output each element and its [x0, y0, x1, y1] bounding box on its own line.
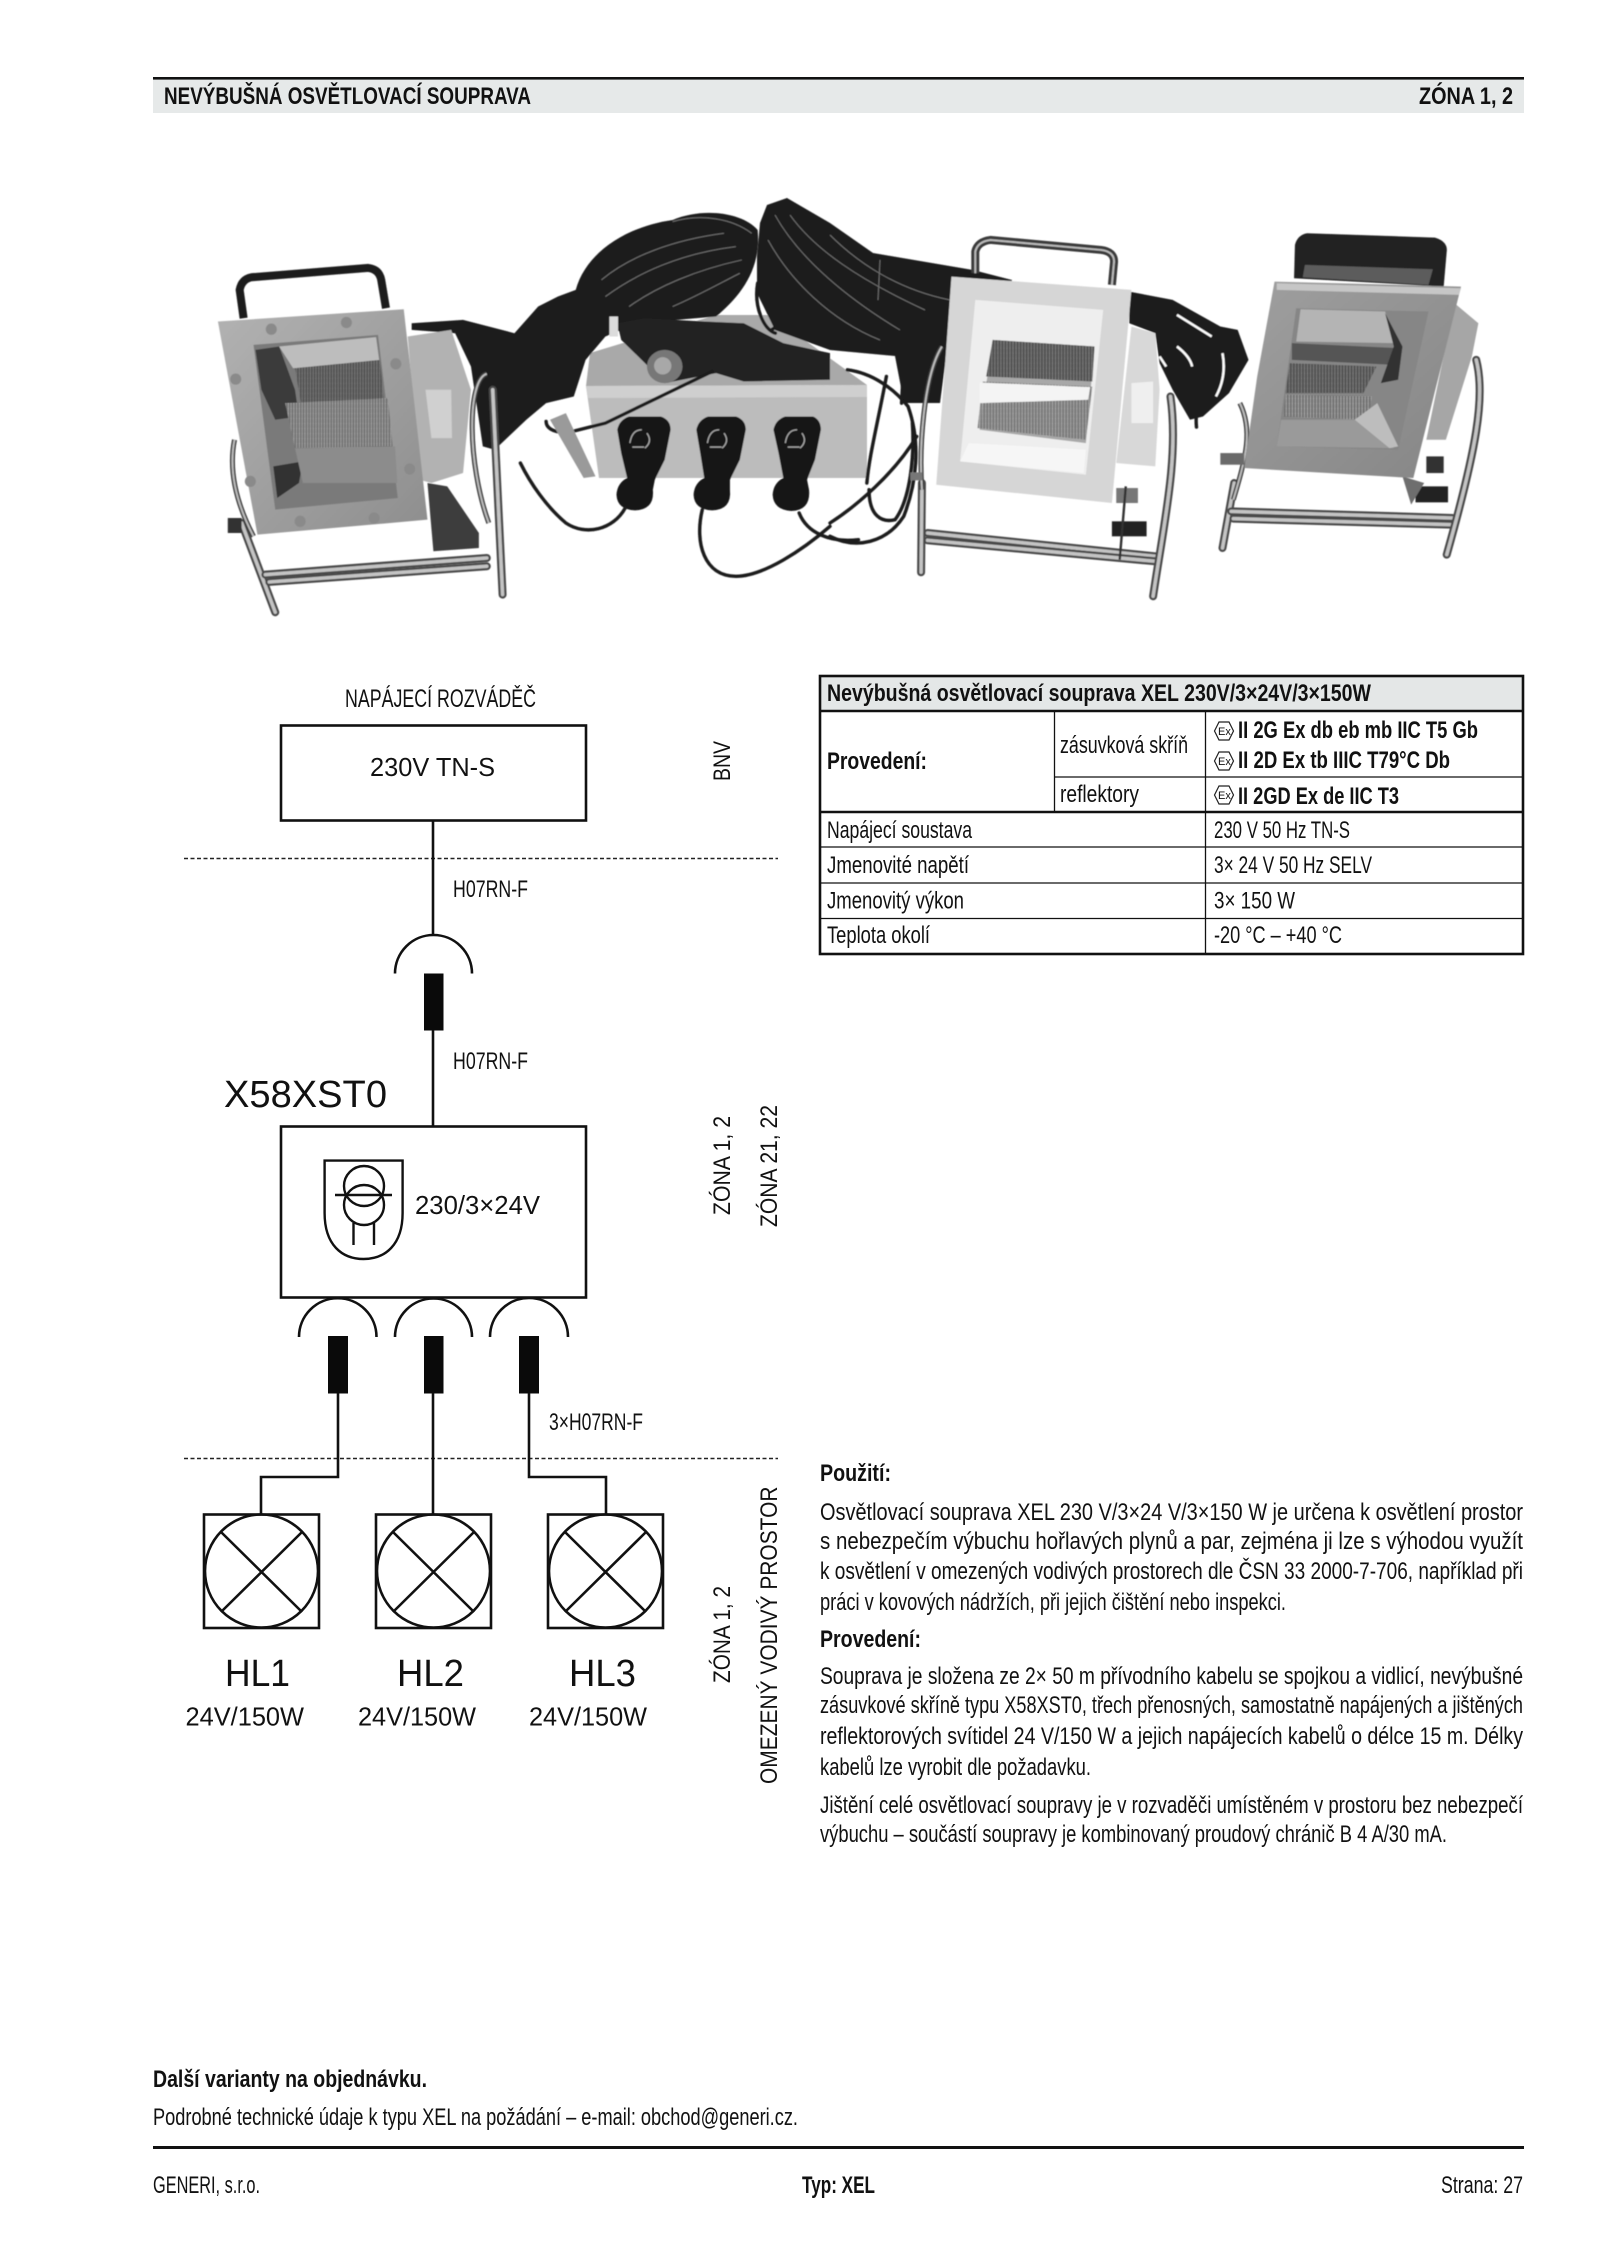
thin cables — [520, 283, 917, 576]
row: teplota okolí: -20 °C – +40 °C — [1214, 922, 1342, 949]
three plugs — [616, 416, 821, 511]
row: jmenovité napětí — [827, 852, 1372, 879]
header zone: ZÓNA 1, 2 — [1419, 82, 1513, 110]
zone label: ZÓNA 1, 2 — [709, 1116, 736, 1215]
body — [936, 277, 1131, 503]
right floodlight — [1220, 233, 1480, 555]
footer: GENERI, s.r.o. — [153, 2172, 260, 2199]
row: provedení: Ex — [1218, 756, 1231, 768]
lamp label HL1: HL1 — [225, 1653, 290, 1695]
heading: Použití: — [820, 1460, 891, 1487]
lamp cables — [261, 1393, 606, 1514]
lamp label HL3 — [529, 1653, 647, 1732]
lamp label HL2 — [358, 1653, 476, 1732]
left cable coil and lead — [412, 213, 758, 450]
row: provedení: Ex — [1218, 790, 1231, 802]
footer: Strana: 27 — [1441, 2172, 1523, 2199]
right cable coil — [757, 198, 1012, 403]
lamp symbol HL2 — [376, 1514, 491, 1628]
cable label: H07RN-F — [453, 876, 528, 903]
row: jmenovitý výkon: Jmenovitý výkon — [827, 888, 964, 914]
rear housing — [1426, 303, 1478, 440]
confined conductive space label: OMEZENÝ VODIVÝ PROSTOR — [756, 1486, 783, 1784]
centre floodlight — [910, 240, 1249, 596]
BNV zone label: BNV — [709, 741, 736, 781]
specification table — [820, 676, 1523, 954]
footer: Typ: XEL — [802, 2172, 875, 2199]
lamp symbol HL3 — [548, 1514, 663, 1628]
header title: NEVÝBUŠNÁ OSVĚTLOVACÍ SOUPRAVA — [164, 82, 531, 110]
left floodlight — [218, 268, 503, 612]
lamp label HL2: HL2 — [397, 1653, 464, 1695]
row: teplota okolí — [827, 922, 1342, 949]
body text — [820, 1499, 1523, 1616]
row: teplota okolí: Teplota okolí — [827, 922, 930, 949]
note: further variants — [153, 2066, 798, 2131]
row: provedení: Ex — [1218, 726, 1231, 738]
lamp label HL3: 24V/150W — [529, 1702, 647, 1732]
note: further variants: Další varianty na objednávku. — [153, 2066, 427, 2093]
handle — [975, 240, 1114, 285]
row: napájecí soustava — [827, 817, 1350, 844]
transformer rating: 230/3×24V — [415, 1190, 541, 1220]
output plugs — [328, 1336, 539, 1394]
lamp label HL3: HL3 — [569, 1653, 636, 1695]
power distributor label: NAPÁJECÍ ROZVÁDĚČ — [345, 684, 536, 713]
section: použití — [820, 1460, 1523, 1616]
stand — [917, 483, 926, 572]
stand — [242, 523, 275, 612]
transformer box — [281, 1126, 586, 1298]
cable label: 3×H07RN-F — [549, 1409, 643, 1436]
body — [218, 309, 427, 535]
zone label: ZÓNA 21, 22 — [756, 1105, 783, 1227]
input socket — [395, 935, 472, 974]
wiring diagram — [184, 684, 783, 1784]
page header bar — [153, 77, 1524, 113]
mount — [427, 483, 479, 551]
row: napájecí soustava: 230 V 50 Hz TN-S — [1214, 817, 1350, 844]
zone boundary line — [184, 1458, 778, 1460]
body text — [820, 1663, 1523, 1848]
cable label: H07RN-F — [453, 1048, 528, 1075]
socket box name: X58XST0 — [224, 1074, 387, 1116]
cable connector — [546, 317, 830, 478]
lamp label HL2: 24V/150W — [358, 1702, 476, 1732]
row: jmenovité napětí: Jmenovité napětí — [827, 852, 969, 879]
icon: Ex mark — [1214, 722, 1234, 804]
section: provedení — [820, 1626, 1523, 1848]
input plug — [424, 974, 444, 1030]
row: provedení: reflektory — [1060, 781, 1139, 808]
socket box — [586, 315, 867, 478]
lamp label HL1 — [186, 1653, 304, 1732]
product photo: three floodlights, socket box and cables — [218, 198, 1480, 612]
lamp symbol HL1 — [204, 1514, 319, 1628]
zone label: ZÓNA 1, 2 — [709, 1586, 736, 1683]
lamp label HL1: 24V/150W — [186, 1702, 304, 1732]
row: napájecí soustava: Napájecí soustava — [827, 817, 972, 844]
zone boundary line — [184, 858, 778, 860]
cables behind — [1129, 292, 1249, 420]
body text: práci v kovových nádržích, při jejich čištění nebo inspekci. — [820, 1589, 1286, 1616]
icon: transformer shield — [325, 1161, 403, 1259]
rear housing — [1116, 327, 1160, 466]
row: provedení — [827, 717, 1478, 810]
row: provedení: II 2GD Ex de IIC T3 — [1238, 783, 1399, 810]
row: jmenovité napětí: 3× 24 V 50 Hz SELV — [1214, 852, 1372, 879]
table title: Nevýbušná osvětlovací souprava XEL 230V/3×24V/3×150W — [827, 680, 1371, 707]
heading: Provedení: — [820, 1626, 921, 1653]
body — [1244, 282, 1461, 478]
handle block — [1294, 233, 1447, 287]
row: provedení: zásuvková skříň — [1060, 732, 1188, 759]
power distributor box: 230V TN-S — [370, 752, 495, 782]
output sockets — [299, 1298, 568, 1337]
body text: kabelů lze vyrobit dle požadavku. — [820, 1754, 1091, 1781]
row: provedení: II 2G Ex db eb mb IIC T5 Gb — [1238, 717, 1478, 744]
stand — [1222, 483, 1234, 548]
power distributor box — [281, 726, 586, 820]
row: provedení: Provedení: — [827, 748, 927, 775]
row: jmenovitý výkon — [827, 888, 1295, 914]
note: further variants: Podrobné technické údaje k typu XEL na požádání – e-mail: obchod@generi.cz. — [153, 2104, 798, 2131]
plug cable — [432, 1030, 434, 1127]
footer — [153, 2146, 1524, 2199]
row: jmenovitý výkon: 3× 150 W — [1214, 888, 1295, 914]
row: provedení: II 2D Ex tb IIIC T79°C Db — [1238, 747, 1450, 774]
supply cable — [432, 820, 434, 935]
rear housing — [408, 330, 471, 483]
handle — [240, 268, 386, 318]
